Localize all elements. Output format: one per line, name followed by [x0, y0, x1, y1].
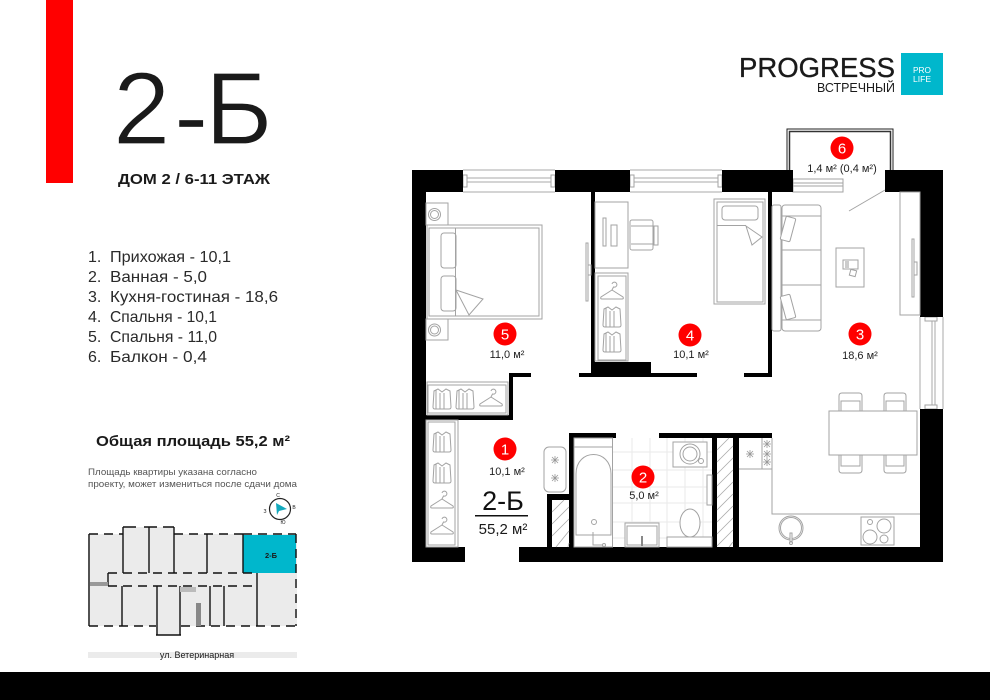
room list: Балкон - 0,4 — [110, 349, 207, 366]
bathtub — [574, 438, 612, 547]
cooktop — [861, 517, 894, 545]
bedroom 4 desk and chair — [595, 202, 658, 268]
room 4 label: 4 — [686, 328, 694, 344]
area disclaimer: проекту, может измениться после сдачи дома — [88, 479, 298, 490]
hallway wardrobe — [426, 420, 458, 547]
walls — [412, 170, 943, 562]
logo badge — [901, 53, 943, 95]
room 5 label: 5 — [501, 326, 509, 344]
room 3 label — [842, 322, 878, 362]
room 2 label: 2 — [639, 470, 647, 486]
logo: ВСТРЕЧНЫЙ — [817, 80, 895, 95]
washbasin — [625, 523, 659, 547]
apartment tag: 55,2 м² — [479, 521, 527, 538]
area disclaimer: Площадь квартиры указана согласно — [88, 467, 257, 478]
room list: Кухня-гостиная - 18,6 — [110, 289, 278, 306]
room 6 label: 1,4 м² (0,4 м²) — [807, 163, 877, 175]
area disclaimer — [88, 467, 298, 490]
room list: Ванная - 5,0 — [110, 269, 207, 286]
room 5 label — [490, 322, 525, 361]
sofa — [772, 205, 821, 331]
bathroom door leaf — [707, 475, 712, 505]
room list: 1. — [88, 249, 101, 266]
room 1 label: 1 — [501, 442, 509, 458]
red accent bar — [46, 0, 73, 183]
logo badge: PRO — [913, 65, 931, 75]
room 5 label: 11,0 м² — [490, 349, 525, 361]
room list: Спальня - 11,0 — [110, 329, 217, 346]
closet shelf — [427, 382, 508, 415]
building key plan — [88, 527, 297, 635]
room list: 3. — [88, 289, 101, 306]
toilet — [667, 509, 712, 547]
highlighted apartment — [243, 535, 296, 573]
floor plan — [412, 129, 943, 562]
windows — [463, 170, 943, 409]
apartment tag — [475, 486, 528, 538]
street label — [88, 650, 297, 660]
bedroom 4 wardrobe — [595, 273, 628, 361]
room list: 6. — [88, 349, 101, 366]
room 6 label: 6 — [838, 140, 846, 158]
highlighted apartment: 2-Б — [265, 551, 278, 560]
footer bar — [0, 672, 990, 700]
bathroom floor tiles — [612, 438, 712, 547]
kitchen counter — [739, 438, 920, 514]
kitchen sink — [779, 516, 803, 544]
balcony — [787, 129, 893, 170]
room 2 label — [629, 466, 659, 502]
bedroom 5 door leaf — [586, 243, 591, 301]
room 3 label: 3 — [856, 326, 864, 344]
subtitle: building and floor: ДОМ 2 / 6-11 ЭТАЖ — [118, 171, 270, 188]
room list: Прихожая - 10,1 — [110, 249, 231, 266]
balcony door swing line — [849, 190, 885, 211]
street label: ул. Ветеринарная — [160, 650, 234, 660]
room list: 2. — [88, 269, 101, 286]
dining table and chairs — [829, 393, 917, 473]
coffee table — [836, 248, 864, 287]
compass: Ю — [280, 520, 286, 526]
hallway radiator — [544, 447, 566, 492]
logo — [739, 52, 943, 95]
room 6 label — [807, 136, 877, 175]
compass: С — [276, 493, 280, 499]
compass: З — [263, 509, 267, 515]
room list: 5. — [88, 329, 101, 346]
logo badge: LIFE — [913, 74, 931, 84]
hatched shafts — [552, 438, 733, 547]
living room wardrobe — [900, 192, 920, 315]
room 4 label: 10,1 м² — [673, 349, 709, 361]
compass — [263, 493, 296, 526]
apartment tag: 2-Б — [482, 486, 524, 516]
room 2 label: 5,0 м² — [629, 490, 659, 502]
title: apartment type: 2-Б — [113, 51, 273, 173]
logo: PROGRESS — [739, 52, 895, 83]
room 1 label: 10,1 м² — [489, 466, 525, 478]
total area: Общая площадь 55,2 м² — [96, 433, 290, 450]
room 3 label: 18,6 м² — [842, 350, 878, 362]
bedroom 4 bed — [714, 199, 765, 304]
room list: Спальня - 10,1 — [110, 309, 217, 326]
washing machine — [673, 442, 707, 467]
room list — [88, 249, 278, 366]
room list: 4. — [88, 309, 101, 326]
room 1 label — [489, 438, 525, 478]
room 4 label — [673, 324, 709, 361]
bedroom 5 furniture — [426, 203, 542, 340]
compass: В — [292, 505, 296, 511]
